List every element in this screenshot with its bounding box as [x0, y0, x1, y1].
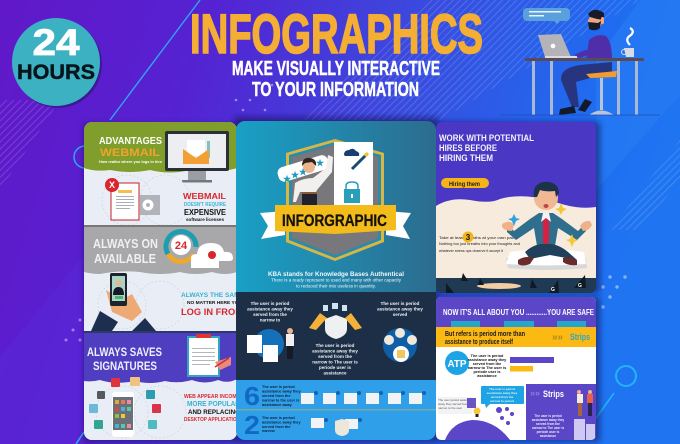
lower area: narrow to period: [490, 399, 514, 403]
blue stats section: narrow: [262, 429, 275, 433]
intro text: [268, 271, 404, 288]
heading: NOW IT'S ALL ABOUT YOU ............YOU ARE SAFE: [443, 308, 595, 317]
character meditating: [502, 182, 592, 270]
yellow band: »»: [552, 332, 564, 343]
illustration: man at desk with laptop: [500, 8, 660, 115]
section: advantages webmail: software licenses: [186, 217, 224, 222]
panel: center infographic: [236, 121, 436, 440]
section: always saves signatures: ALWAYS SAVES: [87, 345, 162, 359]
atp text: narrow to The user is: [468, 366, 506, 370]
dark section: The user is period: [381, 301, 420, 306]
sharks and raft: G: [578, 283, 582, 289]
lower area: The user is period: [534, 414, 562, 418]
section: advantages webmail: [84, 122, 237, 225]
body text: Take at least breaths at your own pace.: [439, 235, 518, 240]
section: always on available: ALWAYS THE SAME: [181, 292, 245, 299]
panel: you are safe card: [436, 297, 596, 440]
blue stats section: narrow to the user is: [262, 398, 299, 402]
badge: 24 hours: [12, 18, 102, 108]
body text: 3: [466, 233, 471, 242]
lower area: [438, 384, 596, 440]
heading: HIRES BEFORE: [439, 143, 497, 154]
body text: whatever stress ups observe it accept it: [439, 248, 504, 253]
dark section: assistance away they: [377, 306, 423, 312]
subtitle: [232, 58, 440, 101]
atp badge: [445, 351, 469, 375]
lower area: narrow to the user: [438, 406, 462, 410]
intro text: KBA stands for Knowledge Bases Authentical: [268, 271, 404, 278]
character with rating card: [276, 154, 333, 207]
banner: inforgraphic: INFORGRAPHIC: [282, 211, 387, 230]
dark section: [236, 292, 436, 380]
atp text: assistance: [477, 374, 497, 378]
section: always on available: 24: [175, 240, 188, 252]
panel shadows: [84, 117, 600, 443]
character with rating card: ★: [283, 174, 292, 184]
dark section: served: [393, 312, 408, 317]
section: always on available: AVAILABLE: [94, 251, 156, 266]
section: always on available: LOG IN FROM: [181, 307, 243, 317]
bars: [510, 357, 554, 372]
character with rating card: ★: [291, 170, 300, 180]
dark section: served from the: [318, 354, 352, 359]
lower area: »»: [530, 388, 540, 398]
blue stats section: assistance away: [262, 403, 293, 407]
lower area: Strips: [543, 389, 564, 400]
sharks and raft: [446, 273, 586, 293]
yellow band: assistance to produce itself: [445, 339, 513, 346]
dark section: assistance: [323, 370, 347, 376]
character with rating card: ★: [316, 158, 325, 168]
pill: hiring them: [441, 178, 489, 188]
yellow band: [436, 327, 596, 347]
dark section: assistance away they: [247, 306, 293, 312]
subtitle: TO YOUR INFORMATION: [252, 79, 419, 101]
yellow band: Strips: [570, 332, 590, 343]
section: always saves signatures: [84, 333, 240, 440]
heading: [439, 134, 534, 161]
blue stats section: 6: [244, 381, 260, 411]
section: advantages webmail: DOESN'T REQUIRE: [184, 202, 226, 208]
dark section: narrow to The user is: [312, 360, 358, 364]
lower area: The user is period: [489, 387, 515, 391]
section: advantages webmail: WEBMAIL: [183, 191, 226, 201]
lower area: assistance: [540, 434, 556, 438]
subtitle: MAKE VISUALLY INTERACTIVE: [232, 58, 440, 80]
section: always saves signatures: DESKTOP APPLICATION: [184, 417, 240, 423]
body text: [439, 232, 520, 253]
blue stats section: served from the: [262, 425, 290, 429]
lower area: assistance away they: [487, 391, 518, 395]
section: always saves signatures: SIGNATURES: [93, 359, 157, 373]
lower area: served from the: [491, 395, 514, 399]
section: advantages webmail: How realtor where you logs in hire: [99, 159, 163, 164]
atp text: The user is period: [471, 354, 504, 358]
character with rating card: ★: [299, 167, 308, 177]
atp text: periode user is: [473, 370, 501, 374]
section: advantages webmail: X: [109, 180, 115, 190]
section: always on available: ALWAYS ON: [93, 236, 158, 251]
lower area: The user period assistance: [438, 398, 474, 402]
sharks and raft: G: [551, 287, 555, 293]
atp text: served from the: [473, 362, 501, 366]
section: always on available: NO MATTER HERE YOU: [187, 300, 242, 305]
section: always saves signatures: MORE POPULAR: [187, 399, 240, 408]
atp text: assistance away they: [468, 358, 507, 362]
lower area: assistance away they: [532, 418, 564, 422]
blue stats section: assistance away they: [262, 390, 302, 394]
blue stats section: The user is period: [262, 416, 295, 420]
pill: hiring them: Hiring them: [449, 181, 480, 188]
shield badge: [286, 139, 384, 261]
divider bar: [84, 225, 237, 227]
dark section: periode user is: [319, 365, 352, 370]
heading: WORK WITH POTENTIAL: [439, 133, 534, 144]
blue stats section: 2: [244, 410, 260, 440]
dark section: The user is period: [316, 343, 355, 348]
section: advantages webmail: ADVANTAGES: [99, 136, 162, 147]
banner: inforgraphic: [260, 205, 411, 239]
section: always saves signatures: WEB APPEAR INCOME: [184, 394, 240, 400]
panel: meditation card: [436, 122, 596, 293]
blue stats section: served from the: [262, 394, 290, 398]
lower area: away they served from: [438, 402, 469, 406]
section: always on available: [84, 227, 245, 331]
yellow band: But refers is period more than: [445, 331, 525, 338]
body text: Nothing too just breaths into your thoughts and: [439, 241, 520, 246]
heading: HIRING THEM: [439, 153, 493, 164]
dark section: served from the: [253, 312, 287, 317]
badge: 24 hours: HOURS: [17, 61, 95, 84]
blue stats section: [236, 380, 436, 440]
intro text: to reduced their into useless in quantity.: [296, 284, 376, 288]
blue stats section: The user is period: [262, 385, 295, 389]
lower area: served from the: [536, 422, 560, 426]
dark section: The user is period: [251, 301, 290, 306]
lower area: periode user is: [537, 430, 560, 434]
dark section: assistance away they: [312, 348, 358, 354]
illustration: two people and buildings: [574, 390, 595, 440]
dark section: narrow to: [260, 318, 280, 322]
section: advantages webmail: EXPENSIVE: [184, 208, 227, 217]
teal tabs: [451, 321, 586, 327]
section: always saves signatures: AND REPLACING: [188, 410, 240, 416]
divider bar: [84, 331, 237, 333]
atp badge: ATP: [448, 359, 467, 370]
atp text: [468, 354, 507, 378]
lower area: narrow to The user is: [532, 426, 564, 430]
intro text: There is a ready represent to used and many with other capacity: [271, 278, 402, 282]
panel: left column: [84, 122, 245, 440]
section: advantages webmail: WEBMAIL: [100, 147, 160, 159]
blue stats section: assistance away they: [262, 420, 302, 424]
title: INFOGRAPHICS: [190, 2, 483, 65]
badge: 24 hours: 24: [32, 22, 80, 63]
